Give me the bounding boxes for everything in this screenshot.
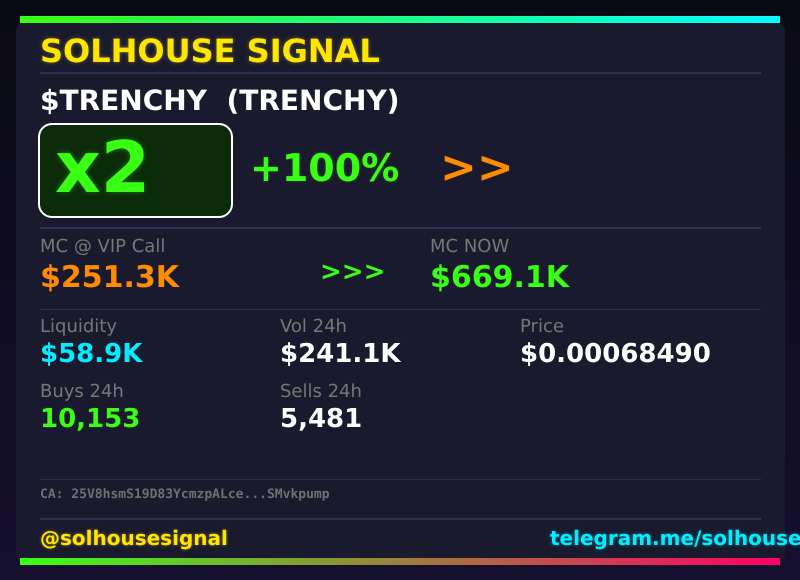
stat: liquidity: $58.9K (40, 339, 142, 369)
bottom gradient bar (20, 558, 780, 565)
stat: MC now (430, 236, 570, 295)
multiplier badge: x2 (55, 126, 150, 209)
stat: MC now: $669.1K (430, 260, 569, 295)
stat: liquidity: Liquidity (40, 316, 117, 337)
stat: MC at VIP call: MC @ VIP Call (40, 236, 165, 257)
stat: liquidity (40, 316, 144, 369)
stat: buys: Buys 24h (40, 381, 124, 402)
stat: buys: 10,153 (40, 404, 140, 434)
stat: volume: Vol 24h (280, 316, 347, 337)
stat: volume (280, 316, 402, 369)
stat: sells: Sells 24h (280, 381, 362, 402)
stat: sells (280, 381, 362, 434)
arrow: green chevrons: >>> (320, 257, 385, 287)
stat: MC now: MC NOW (430, 236, 509, 257)
title: SOLHOUSE SIGNAL (40, 32, 380, 70)
stat: MC at VIP call (40, 236, 180, 295)
stat: price (520, 316, 711, 369)
stat: volume: $241.1K (280, 339, 400, 369)
stat: sells: 5,481 (280, 404, 362, 434)
stat: price: Price (520, 316, 564, 337)
token name: $TRENCHY (TRENCHY) (40, 84, 400, 117)
percent gain: +100% (250, 146, 399, 190)
arrow: orange chevrons: >> (440, 142, 514, 193)
footer link: telegram.me/solhouse (550, 526, 800, 550)
stat: price: $0.00068490 (520, 339, 711, 369)
stat: MC at VIP call: $251.3K (40, 260, 179, 295)
footer handle: @solhousesignal (40, 526, 228, 550)
stat: buys (40, 381, 140, 434)
multiplier badge (38, 123, 233, 218)
contract address: CA: 25V8hsmS19D83YcmzpALce...SMvkpump (40, 487, 330, 502)
top gradient bar (20, 16, 780, 23)
